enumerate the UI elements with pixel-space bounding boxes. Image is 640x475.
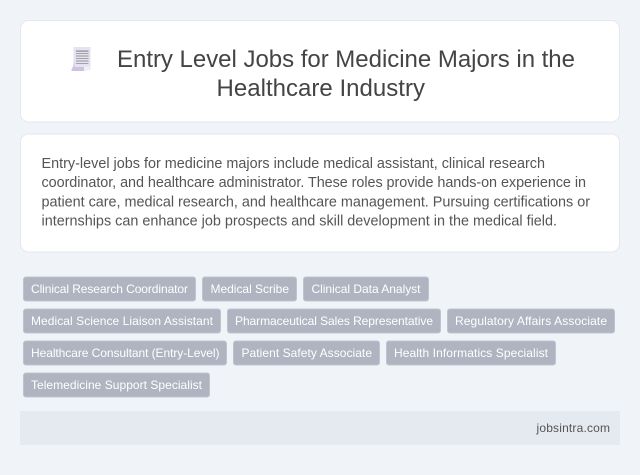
text block: description: Entry-level jobs for medicine majors include medical assistant, clinical research [42,156,545,172]
title [117,46,575,102]
text block: description: patient care, medical research, and healthcare management. Pursuing certifications or [42,194,590,210]
tag [24,373,210,397]
tag [24,277,196,301]
tag [386,341,556,365]
tag: Pharmaceutical Sales Representative [235,314,433,328]
tag [24,309,220,333]
tag: Regulatory Affairs Associate [455,314,607,328]
tag: Healthcare Consultant (Entry-Level) [31,346,220,360]
tag [448,309,614,333]
panel: description [20,134,620,252]
text block: description: internships can enhance job prospects and skill development in the medical field. [42,214,557,230]
tag [304,277,428,301]
text block: description [42,156,590,230]
icon: paper scroll [71,47,90,71]
footer bar [20,411,620,445]
tag [202,277,296,301]
title: Entry Level Jobs for Medicine Majors in the [117,46,575,73]
tag [24,341,226,365]
panel: header [20,20,620,122]
tag: Health Informatics Specialist [394,346,549,360]
tag list [24,277,614,397]
tag [228,309,440,333]
tag: Medical Scribe [210,282,289,296]
tag: Clinical Research Coordinator [31,282,188,296]
tag: Clinical Data Analyst [312,282,421,296]
text block: description: coordinator, and healthcare administrator. These roles provide hands-on experience in [42,175,586,191]
tag: Telemedicine Support Specialist [31,378,203,392]
tag: Medical Science Liaison Assistant [31,314,214,328]
tag [234,341,380,365]
tag: Patient Safety Associate [242,346,372,360]
footer source text: jobsintra.com [536,421,610,435]
title: Healthcare Industry [216,75,425,102]
